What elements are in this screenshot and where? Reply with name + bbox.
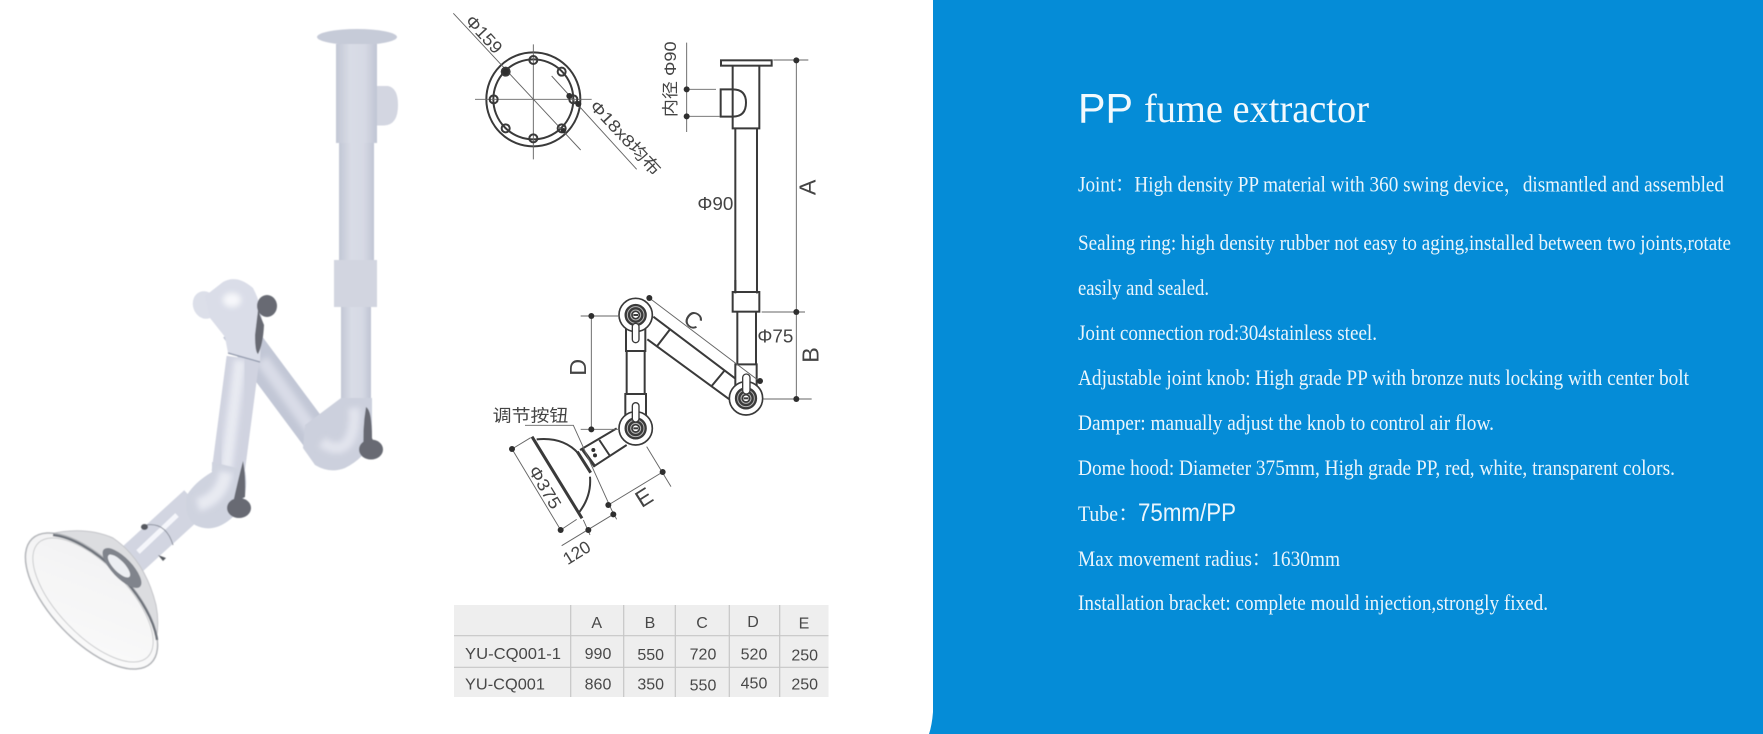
spec: adjustable knob: Adjustable joint knob: High grade PP with bronze nuts locking with center bolt (1078, 365, 1689, 390)
product illustration: ceiling-mounted fume extractor arm (3, 29, 398, 691)
upper housing (336, 44, 377, 143)
spec: sealing ring continued: easily and sealed. (1078, 275, 1209, 300)
technical drawing: upper tube side view (661, 41, 821, 293)
table row: YU-CQ001: 250 (791, 676, 818, 694)
table row: YU-CQ001-1: 520 (741, 646, 767, 664)
label: dimension A: A (795, 179, 821, 195)
side outlet stub (376, 86, 398, 126)
knob: lower elbow (359, 407, 383, 460)
table header: D (747, 614, 759, 631)
spec: tube: 75mm/PP (1138, 499, 1236, 527)
dimensions table (454, 605, 828, 697)
table header: B (645, 615, 655, 632)
spec: installation bracket: Installation bracket: complete mould injection,strongly fixed. (1078, 590, 1548, 615)
table header: C (696, 615, 708, 632)
label: dimension E: E (631, 482, 657, 512)
table row: YU-CQ001: 350 (637, 676, 664, 694)
panel: blue specification panel (929, 0, 1763, 734)
spec: damper: Damper: manually adjust the knob to control air flow. (1078, 410, 1494, 435)
technical drawing: mounting flange top view (453, 11, 665, 179)
label: tube diameter 75: Φ75 (757, 325, 793, 346)
table row: YU-CQ001: YU-CQ001 (465, 676, 545, 694)
ceiling flange (317, 29, 397, 45)
spec: tube: Tube (1078, 501, 1118, 526)
label: bolt holes: Φ18x8均布 (586, 97, 665, 179)
label: flange diameter: Φ159 (461, 11, 507, 58)
lower tube (341, 305, 371, 410)
hood profile (532, 437, 590, 518)
upper joint head (189, 279, 262, 362)
table row: YU-CQ001-1: 720 (690, 646, 716, 664)
spec: tube: ： (1118, 501, 1140, 526)
label: dimension D: D (565, 359, 591, 376)
table row: YU-CQ001: 450 (741, 676, 767, 692)
spec: dome hood: Dome hood: Diameter 375mm, High grade PP, red, white, transparent colors. (1078, 455, 1675, 480)
dimension lines (509, 280, 812, 546)
lower elbow of diagonal arm (303, 398, 372, 470)
table header: A (591, 615, 602, 632)
knob: lower joint (227, 461, 251, 518)
label: 120: 120 (559, 537, 594, 569)
table header (591, 614, 809, 632)
table row: YU-CQ001-1: YU-CQ001-1 (465, 646, 561, 663)
table row: YU-CQ001-1 (465, 646, 818, 664)
arm joints (619, 298, 763, 445)
upper tube (339, 143, 374, 261)
knob: upper joint (255, 295, 277, 354)
spec: tube (1078, 499, 1236, 527)
table row: YU-CQ001: 550 (690, 678, 716, 694)
table row: YU-CQ001: 860 (585, 676, 611, 694)
label: dimension C: C (679, 305, 708, 335)
label: tube diameter: Φ90 (697, 193, 733, 214)
table row: YU-CQ001-1: 990 (585, 646, 611, 663)
table row: YU-CQ001-1: 550 (637, 647, 664, 664)
tube sleeve (334, 260, 377, 307)
specification text (1078, 172, 1731, 615)
label: dimension B: B (798, 347, 824, 363)
spec: max radius: Max movement radius：1630mm (1078, 546, 1340, 571)
diagonal arm (236, 328, 317, 437)
title: fume extractor (1144, 86, 1369, 131)
damper knob and pin (141, 524, 166, 561)
middle arm (226, 358, 243, 473)
label: adjustment knob: 调节按钮 (493, 405, 568, 425)
forearm tube (125, 502, 195, 566)
technical drawing: articulated arm and hood (493, 280, 824, 569)
label: inner diameter: 内径 Φ90 (661, 41, 680, 117)
table row: YU-CQ001 (465, 676, 818, 694)
title: PP (1078, 84, 1133, 132)
transparent dome hood (3, 511, 180, 691)
table row: YU-CQ001-1: 250 (791, 648, 818, 664)
lower elbow of middle arm (186, 462, 246, 528)
label: hood diameter: Φ375 (524, 462, 566, 512)
table header: E (799, 616, 809, 632)
spec: joint connection rod: Joint connection rod:304stainless steel. (1078, 320, 1377, 345)
